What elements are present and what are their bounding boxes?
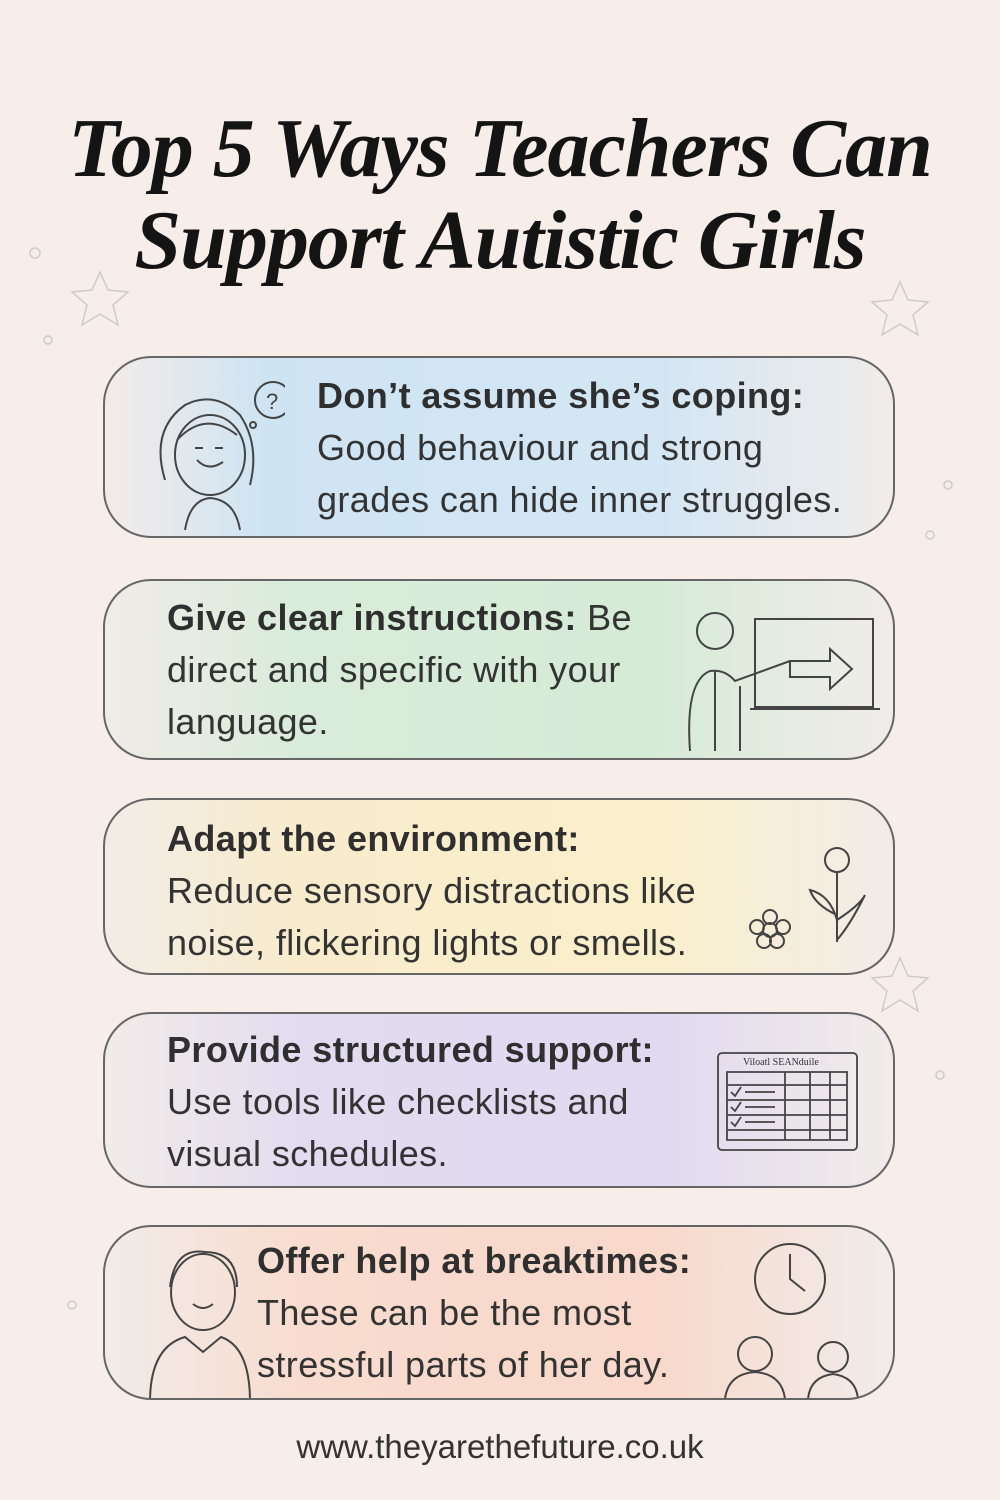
text: noise, flickering lights or smells. <box>167 922 687 963</box>
panel: adapt the environment <box>103 798 895 975</box>
text: Provide structured support: <box>167 1029 654 1070</box>
text: language. <box>167 701 329 742</box>
icon: teacher at board <box>688 612 880 751</box>
title: Support Autistic Girls <box>134 194 866 287</box>
text: Reduce sensory distractions like <box>167 870 696 911</box>
panel: give clear instructions <box>103 579 895 760</box>
icon: girl thinking: ? <box>266 389 278 414</box>
icon: flowers <box>749 847 866 949</box>
title <box>68 102 932 287</box>
text <box>167 1029 654 1174</box>
text: direct and specific with your <box>167 649 621 690</box>
text <box>167 818 696 963</box>
panel: provide structured support <box>103 1012 895 1188</box>
text <box>167 597 632 742</box>
text: These can be the most <box>257 1292 632 1333</box>
text: Give clear instructions: Be <box>167 597 632 638</box>
text: stressful parts of her day. <box>257 1344 669 1385</box>
text <box>257 1240 691 1385</box>
text <box>317 375 842 520</box>
text: Adapt the environment: <box>167 818 580 859</box>
text: Don’t assume she’s coping: <box>317 375 804 416</box>
text: visual schedules. <box>167 1133 448 1174</box>
icon: visual schedule <box>717 1052 858 1151</box>
icon: visual schedule: Viloatl SEANduile <box>743 1057 819 1068</box>
icon: girl thinking <box>160 381 285 530</box>
text: grades can hide inner struggles. <box>317 479 842 520</box>
text: Offer help at breaktimes: <box>257 1240 691 1281</box>
icon: person <box>149 1250 251 1398</box>
panel: don't assume she's coping <box>103 356 895 538</box>
title: Top 5 Ways Teachers Can <box>68 102 932 195</box>
text: Use tools like checklists and <box>167 1081 629 1122</box>
icon: clock and children <box>724 1243 859 1398</box>
panel: offer help at breaktimes <box>103 1225 895 1400</box>
footer url: www.theyarethefuture.co.uk <box>296 1428 704 1465</box>
text: Good behaviour and strong <box>317 427 763 468</box>
